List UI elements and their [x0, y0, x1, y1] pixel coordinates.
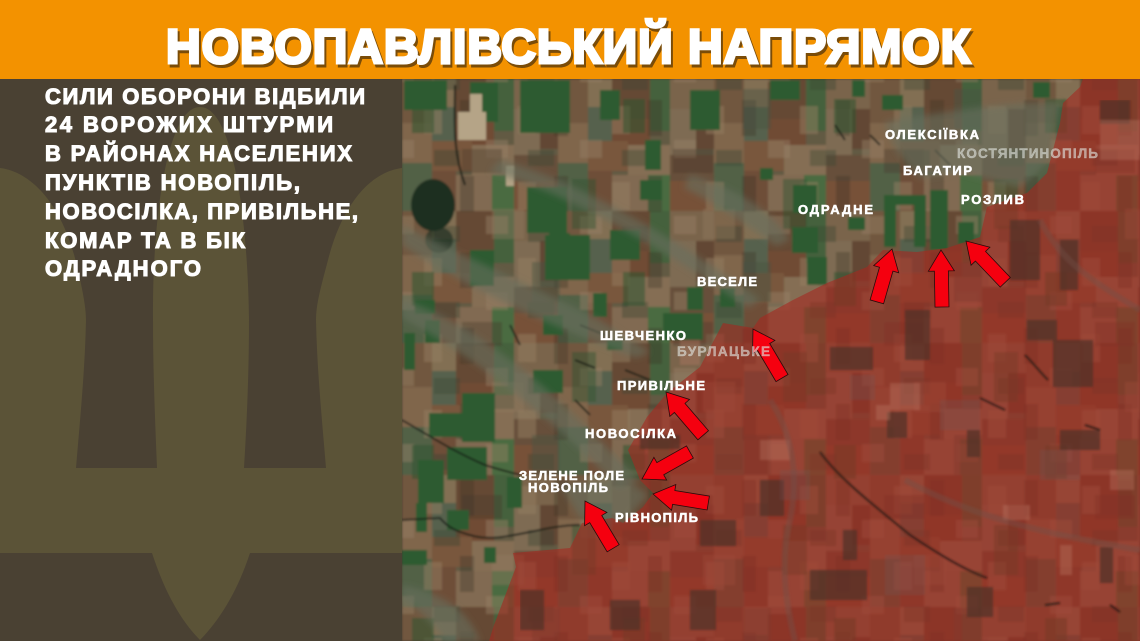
occupied territory (red overlay) — [489, 79, 1140, 641]
text block: summary: ПУНКТІВ НОВОПІЛЬ, — [45, 170, 300, 195]
map valleys and settlements — [402, 102, 1060, 641]
map place labels — [519, 127, 1098, 525]
occupied-area dark and light fields — [520, 100, 1140, 641]
label: Odradne: ОДРАДНЕ — [798, 202, 873, 217]
text block: summary: 24 ВОРОЖИХ ШТУРМИ — [45, 112, 333, 137]
label: Bahatyr: БАГАТИР — [903, 163, 972, 178]
arrow: toward Vesele — [742, 322, 793, 385]
arrows — [574, 232, 1015, 555]
label: Pryvilne: ПРИВІЛЬНЕ — [617, 378, 705, 393]
label: Rivnopil: РІВНОПІЛЬ — [615, 510, 698, 525]
label: Rozlyv: РОЗЛИВ — [961, 192, 1024, 207]
arrow: toward Novosilka — [636, 441, 696, 490]
title: НОВОПАВЛІВСЬКИЙ НАПРЯМОК — [166, 19, 971, 74]
header band — [0, 0, 1140, 79]
panel: satellite map — [402, 79, 1140, 641]
text block: summary: СИЛИ ОБОРОНИ ВІДБИЛИ — [45, 84, 365, 109]
emblem: trident watermark — [0, 107, 402, 640]
arrow: toward Odradne — [864, 245, 904, 305]
title: НОВОПАВЛІВСЬКИЙ НАПРЯМОК — [168, 22, 973, 77]
label: Shevchenko: ШЕВЧЕНКО — [600, 328, 686, 343]
label: Kostiantynopil: КОСТЯНТИНОПІЛЬ — [957, 146, 1098, 161]
arrow: toward Pryvilne — [656, 384, 713, 444]
text block: summary: НОВОСІЛКА, ПРИВІЛЬНЕ, — [45, 199, 358, 224]
text block: summary: КОМАР ТА В БІК — [45, 228, 246, 253]
label: Vesele: ВЕСЕЛЕ — [697, 274, 757, 289]
left panel background — [0, 79, 402, 641]
text block: summary — [45, 84, 365, 281]
map tone overlay — [402, 79, 1140, 641]
label: Burlatske: БУРЛАЦЬКЕ — [677, 344, 770, 359]
arrow: toward Novopil — [574, 494, 624, 555]
text block: summary: В РАЙОНАХ НАСЕЛЕНИХ — [45, 141, 352, 166]
label: Zelene Pole: ЗЕЛЕНЕ ПОЛЕ — [519, 468, 624, 483]
label: Novopil: НОВОПІЛЬ — [528, 480, 608, 495]
label: Novosilka: НОВОСІЛКА — [585, 426, 677, 441]
arrow: toward Rozlyv — [957, 232, 1015, 291]
label: Oleksiivka: ОЛЕКСІЇВКА — [885, 127, 980, 142]
arrow: toward Rivnopil — [651, 481, 710, 516]
arrow: toward Bahatyr — [928, 250, 955, 307]
map farmland patchwork — [402, 79, 1140, 641]
text block: summary: ОДРАДНОГО — [45, 256, 201, 281]
